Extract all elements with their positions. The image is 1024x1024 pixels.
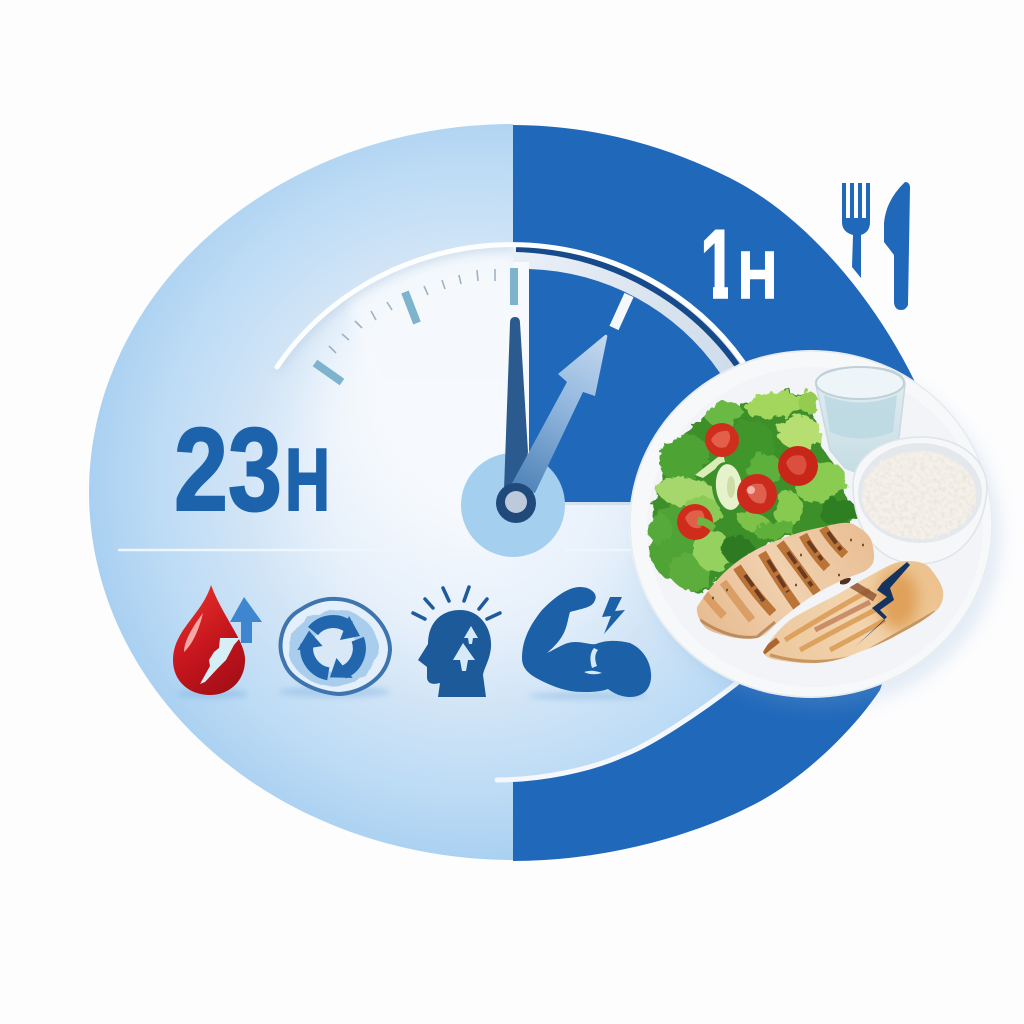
- cucumber: [695, 453, 745, 513]
- icon: lightning bolt on chicken: [855, 562, 910, 647]
- icon: fork and knife: [842, 182, 910, 310]
- glass of water: [816, 367, 905, 478]
- salad: [643, 388, 858, 599]
- dial tick marks: [315, 268, 629, 382]
- dark hour hand: [504, 317, 528, 497]
- panel: lower right dial area: [513, 502, 780, 780]
- icon: blood drop with syringe and up arrow: [173, 585, 262, 699]
- icon: cell with recycling arrows: [278, 599, 390, 698]
- clock centre pin: [496, 483, 536, 523]
- dial outer band on the eating side: [513, 243, 743, 505]
- white strip between wedge and dial: [513, 262, 529, 502]
- rice bowl: [853, 437, 987, 564]
- label: 23H: 23: [174, 404, 282, 536]
- plate shadow: [640, 364, 1000, 708]
- icon: head with rays and up arrows: [413, 587, 500, 697]
- dial rim: [516, 249, 737, 365]
- label: 1H: H: [738, 238, 777, 313]
- icon: flexed muscle arm with bolt: [522, 587, 651, 700]
- label: 23H: H: [285, 430, 330, 529]
- panel: 23 hour fasting half of the ellipse: [89, 124, 513, 860]
- light arrow hand: [510, 335, 607, 493]
- clock hub disc: [461, 453, 565, 557]
- plate: [629, 350, 993, 698]
- label: 1H: 1: [700, 209, 736, 319]
- horizontal divider of the dial: [118, 549, 640, 551]
- panel: clock dial face: [277, 240, 743, 780]
- grilled chicken breast, left: [696, 522, 874, 639]
- tomatoes: [677, 423, 818, 540]
- panel: plate with meal: [629, 350, 993, 698]
- panel: 1 hour eating half of the ellipse: [513, 125, 925, 861]
- lower dial rim: [497, 683, 737, 780]
- eating wedge of the dial: [529, 269, 720, 502]
- label: 1H: [698, 209, 777, 319]
- grilled chicken breast, right: [763, 561, 944, 664]
- white tick on eating wedge: [614, 295, 629, 328]
- recycling arrows: [292, 616, 371, 687]
